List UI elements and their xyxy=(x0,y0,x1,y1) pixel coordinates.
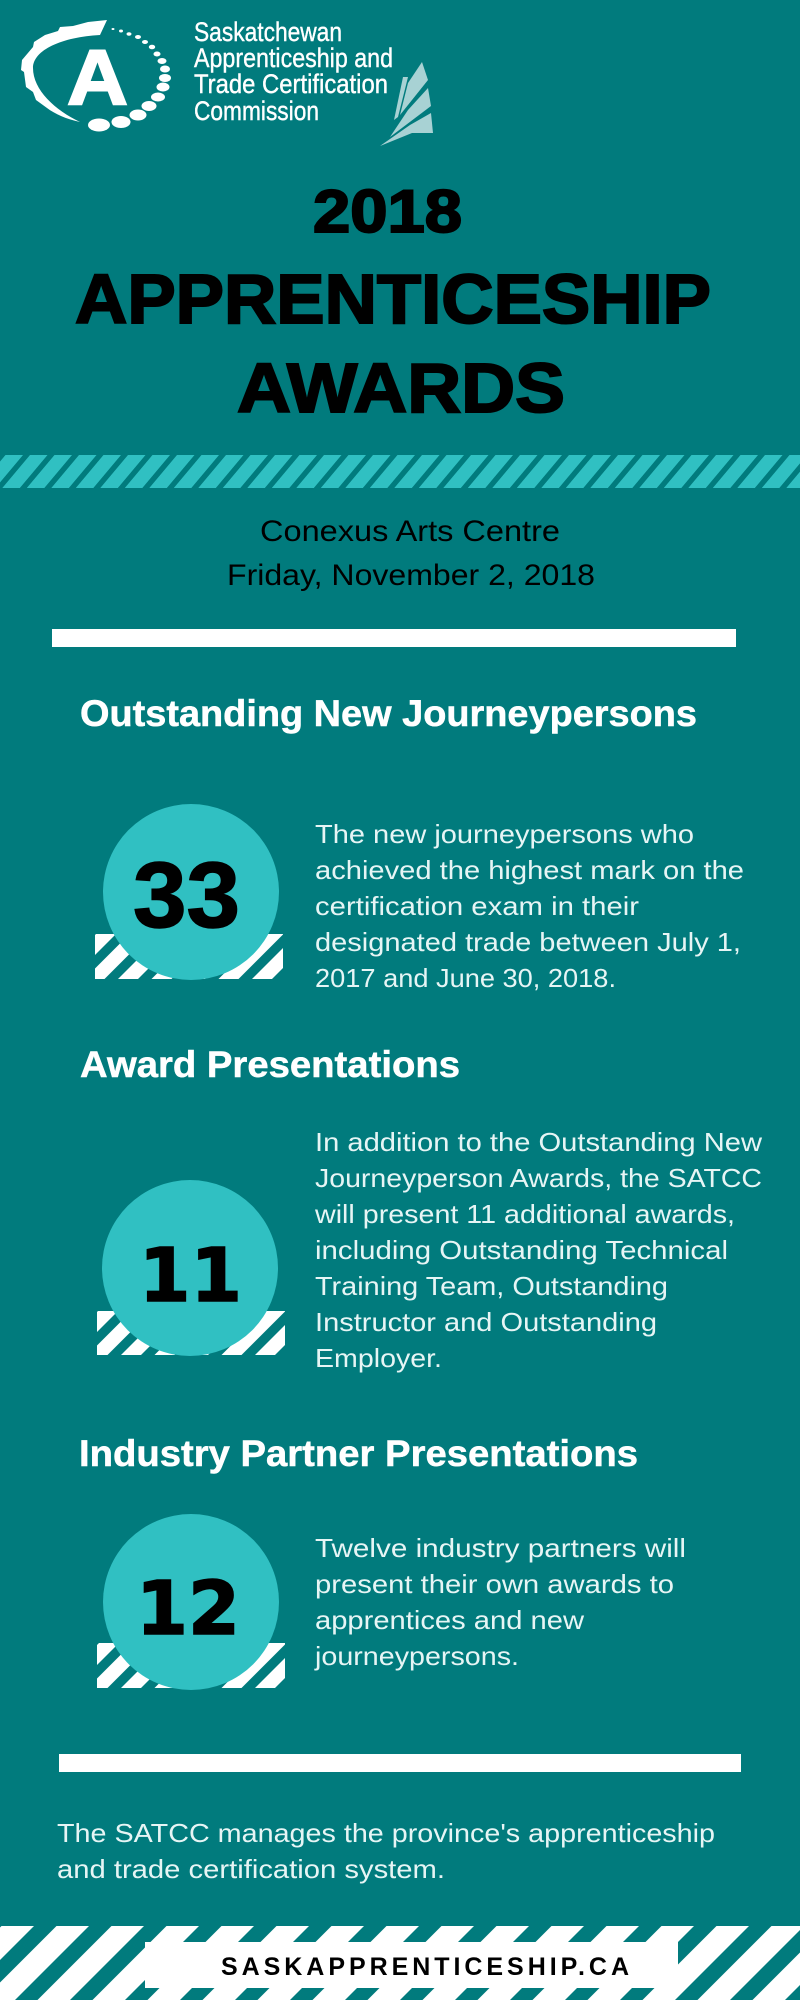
event details xyxy=(227,515,595,592)
logo xyxy=(21,17,433,146)
icon: sail xyxy=(380,62,433,146)
website: SASKAPPRENTICESHIP.CA xyxy=(221,1953,629,1981)
event details: Conexus Arts Centre xyxy=(260,515,560,548)
stat: 12 xyxy=(97,1514,285,1690)
bottom divider xyxy=(59,1754,741,1772)
heading: Award Presentations xyxy=(80,1044,460,1085)
stat: 11: 11 xyxy=(139,1233,242,1319)
description: 2017 and June 30, 2018. xyxy=(315,963,616,993)
stat: 33 xyxy=(95,804,283,980)
heading: Outstanding New Journeypersons xyxy=(80,693,697,734)
logo wordmark: Saskatchewan xyxy=(194,17,342,47)
description: apprentices and new xyxy=(315,1605,584,1635)
description xyxy=(314,1127,762,1373)
stat: 12: 12 xyxy=(136,1566,240,1652)
description xyxy=(314,1533,686,1671)
title: 2018 xyxy=(313,178,462,245)
description: In addition to the Outstanding New xyxy=(315,1127,762,1157)
footer band xyxy=(0,1926,800,2000)
description: certification exam in their xyxy=(315,891,639,921)
logo wordmark: Commission xyxy=(194,96,319,126)
description: Twelve industry partners will xyxy=(315,1533,686,1563)
logo wordmark: Apprenticeship and xyxy=(194,43,393,73)
closing statement xyxy=(57,1818,715,1884)
description: Instructor and Outstanding xyxy=(315,1307,657,1337)
description: designated trade between July 1, xyxy=(315,927,741,957)
closing statement: The SATCC manages the province's apprenticeship xyxy=(57,1818,715,1848)
top divider xyxy=(52,629,736,647)
title: APPRENTICESHIP xyxy=(75,260,711,338)
title: AWARDS xyxy=(237,349,565,427)
panel: Industry Partner Presentations xyxy=(79,1433,686,1690)
stat: 33: 33 xyxy=(133,843,240,947)
description: present their own awards to xyxy=(315,1569,674,1599)
description: Training Team, Outstanding xyxy=(315,1271,668,1301)
icon: SATCC arc emblem xyxy=(21,20,171,132)
description: Employer. xyxy=(315,1343,442,1373)
logo wordmark xyxy=(194,17,393,126)
description: will present 11 additional awards, xyxy=(314,1199,735,1229)
description: achieved the highest mark on the xyxy=(315,855,744,885)
description: journeypersons. xyxy=(314,1641,519,1671)
logo wordmark: Trade Certification xyxy=(194,69,388,99)
heading: Industry Partner Presentations xyxy=(79,1433,638,1474)
description: Journeyperson Awards, the SATCC xyxy=(315,1163,762,1193)
closing statement: and trade certification system. xyxy=(57,1854,445,1884)
title xyxy=(75,178,711,427)
stat: 11 xyxy=(97,1180,285,1356)
description: The new journeypersons who xyxy=(315,819,694,849)
panel: Award Presentations xyxy=(80,1044,762,1373)
panel: Outstanding New Journeypersons xyxy=(80,693,744,993)
description: including Outstanding Technical xyxy=(315,1235,728,1265)
icon: SATCC arc emblem: A xyxy=(67,33,128,121)
description xyxy=(315,819,744,993)
event details: Friday, November 2, 2018 xyxy=(227,559,595,592)
striped band xyxy=(0,455,800,488)
